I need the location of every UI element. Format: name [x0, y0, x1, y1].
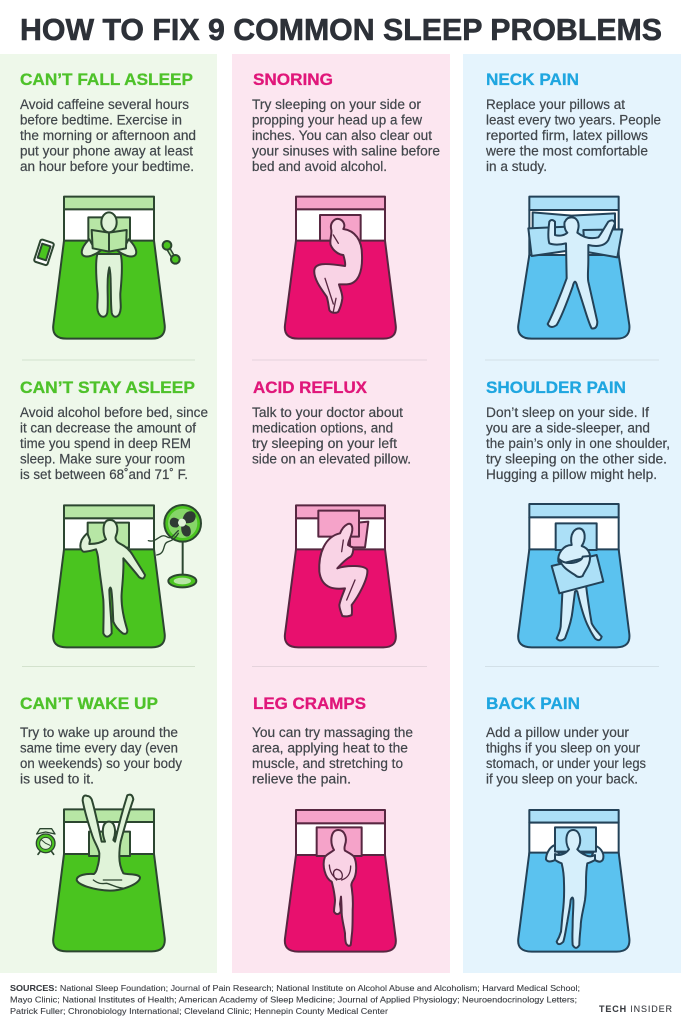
text block: back pain: thighs if you sleep on your	[486, 740, 640, 756]
text block: can't fall asleep: an hour before your bedtime.	[20, 159, 194, 174]
title: HOW TO FIX 9 COMMON SLEEP PROBLEMS	[20, 13, 662, 47]
heading: back pain: BACK PAIN	[486, 694, 580, 713]
sources: Patrick Fuller; Chronobiology International; Cleveland Clinic; Hennepin County Medical Center	[10, 1006, 388, 1016]
text block: shoulder pain: Don’t sleep on your side. If	[486, 405, 649, 420]
text block: can't stay asleep: it can decrease the amount of	[20, 420, 196, 436]
text block: neck pain: were the most comfortable	[485, 144, 648, 158]
heading: acid reflux: ACID REFLUX	[253, 378, 368, 397]
heading: can't wake up: CAN’T WAKE UP	[20, 694, 158, 713]
illustration: side sleeper with raised head	[285, 197, 396, 339]
text block: can't stay asleep: sleep. Make sure your room	[20, 452, 185, 466]
sources: SOURCES: National Sleep Foundation; Journal of Pain Research; National Institute on Alcohol Abuse and Alcoholism; Harvard Medical School;	[10, 983, 580, 993]
text block: can't wake up: Try to wake up around the	[20, 725, 178, 740]
illustration: massaging a cramped leg	[285, 810, 396, 952]
text block: can't stay asleep	[20, 405, 208, 482]
text block: shoulder pain: the pain’s only in one shoulder,	[486, 436, 670, 451]
heading: shoulder pain: SHOULDER PAIN	[486, 378, 626, 397]
text block: acid reflux: medication options, and	[252, 420, 393, 436]
text block: can't wake up: on weekends) so your body	[20, 756, 182, 771]
text block: neck pain: least every two years. People	[486, 112, 661, 128]
heading: neck pain: NECK PAIN	[486, 70, 579, 89]
text block: can't wake up	[20, 725, 182, 786]
heading: snoring: SNORING	[253, 70, 333, 89]
panel: green column	[0, 54, 217, 973]
text block: leg cramps	[252, 725, 413, 786]
illustration: back sleeper with arms behind head	[518, 810, 629, 952]
text block: snoring	[252, 97, 440, 174]
illustration: sleeper with stacked pillows	[518, 197, 629, 339]
text block: can't stay asleep: is set between 68˚and 71˚ F.	[20, 467, 188, 482]
text block: can't fall asleep: before bedtime. Exercise in	[20, 112, 182, 128]
text block: acid reflux: side on an elevated pillow.	[252, 452, 411, 466]
text block: can't fall asleep: Avoid caffeine several hours	[20, 97, 189, 112]
text block: back pain: Add a pillow under your	[486, 725, 630, 740]
illustration: stretching on bed with alarm clock	[36, 795, 165, 951]
panel: pink column	[232, 54, 450, 973]
text block: shoulder pain: Hugging a pillow might help.	[486, 467, 657, 482]
text block: leg cramps: You can try massaging the	[252, 725, 413, 740]
text block: neck pain: reported firm, latex pillows	[486, 128, 648, 143]
text block: leg cramps: muscle, and stretching to	[252, 756, 403, 771]
sources: Mayo Clinic; National Institutes of Health; American Academy of Sleep Medicine; Journal of Applied Physiology; Neuroendocrinology Letters;	[10, 994, 577, 1004]
sources	[10, 983, 580, 1016]
text block: back pain	[486, 725, 646, 786]
text block: snoring: your sinuses with saline before	[252, 144, 440, 158]
text block: acid reflux: Talk to your doctor about	[252, 405, 403, 420]
panel: blue column	[463, 54, 681, 973]
text block: snoring: bed and avoid alcohol.	[252, 159, 387, 174]
text block: back pain: if you sleep on your back.	[486, 772, 638, 786]
illustration: hugging a pillow	[518, 504, 629, 647]
text block: leg cramps: relieve the pain.	[252, 772, 351, 786]
text block: shoulder pain: try sleeping on the other side.	[486, 452, 667, 466]
heading: can't stay asleep: CAN’T STAY ASLEEP	[20, 378, 195, 397]
text block: shoulder pain	[486, 405, 670, 482]
logo: tech insider: TECH INSIDER	[599, 1004, 672, 1014]
text block: neck pain: Replace your pillows at	[486, 97, 625, 112]
text block: leg cramps: area, applying heat to the	[252, 740, 408, 756]
text block: can't stay asleep: Avoid alcohol before bed, since	[20, 405, 208, 420]
text block: can't wake up: is used to it.	[20, 772, 94, 786]
illustration: reading in bed with phone and dumbbell	[34, 197, 180, 339]
illustration: left side sleeper on elevated pillow	[285, 505, 396, 647]
text block: can't fall asleep: put your phone away at least	[20, 144, 193, 158]
text block: acid reflux	[252, 405, 411, 466]
text block: shoulder pain: you are a side-sleeper, and	[486, 420, 650, 436]
text block: back pain: stomach, or under your legs	[486, 756, 646, 771]
text block: can't wake up: same time every day (even	[20, 740, 178, 756]
heading: can't fall asleep: CAN’T FALL ASLEEP	[20, 70, 193, 89]
text block: snoring: Try sleeping on your side or	[252, 97, 421, 112]
text block: can't fall asleep: the morning or afternoon and	[20, 128, 196, 143]
text block: neck pain	[485, 97, 661, 174]
text block: can't fall asleep	[20, 97, 196, 174]
illustration: sleeper with fan	[53, 505, 201, 647]
text block: neck pain: in a study.	[486, 159, 547, 174]
text block: acid reflux: try sleeping on your left	[252, 436, 397, 451]
text block: snoring: inches. You can also clear out	[252, 128, 432, 143]
text block: snoring: propping your head up a few	[252, 112, 422, 128]
heading: leg cramps: LEG CRAMPS	[253, 694, 366, 713]
text block: can't stay asleep: time you spend in deep REM	[20, 436, 191, 451]
